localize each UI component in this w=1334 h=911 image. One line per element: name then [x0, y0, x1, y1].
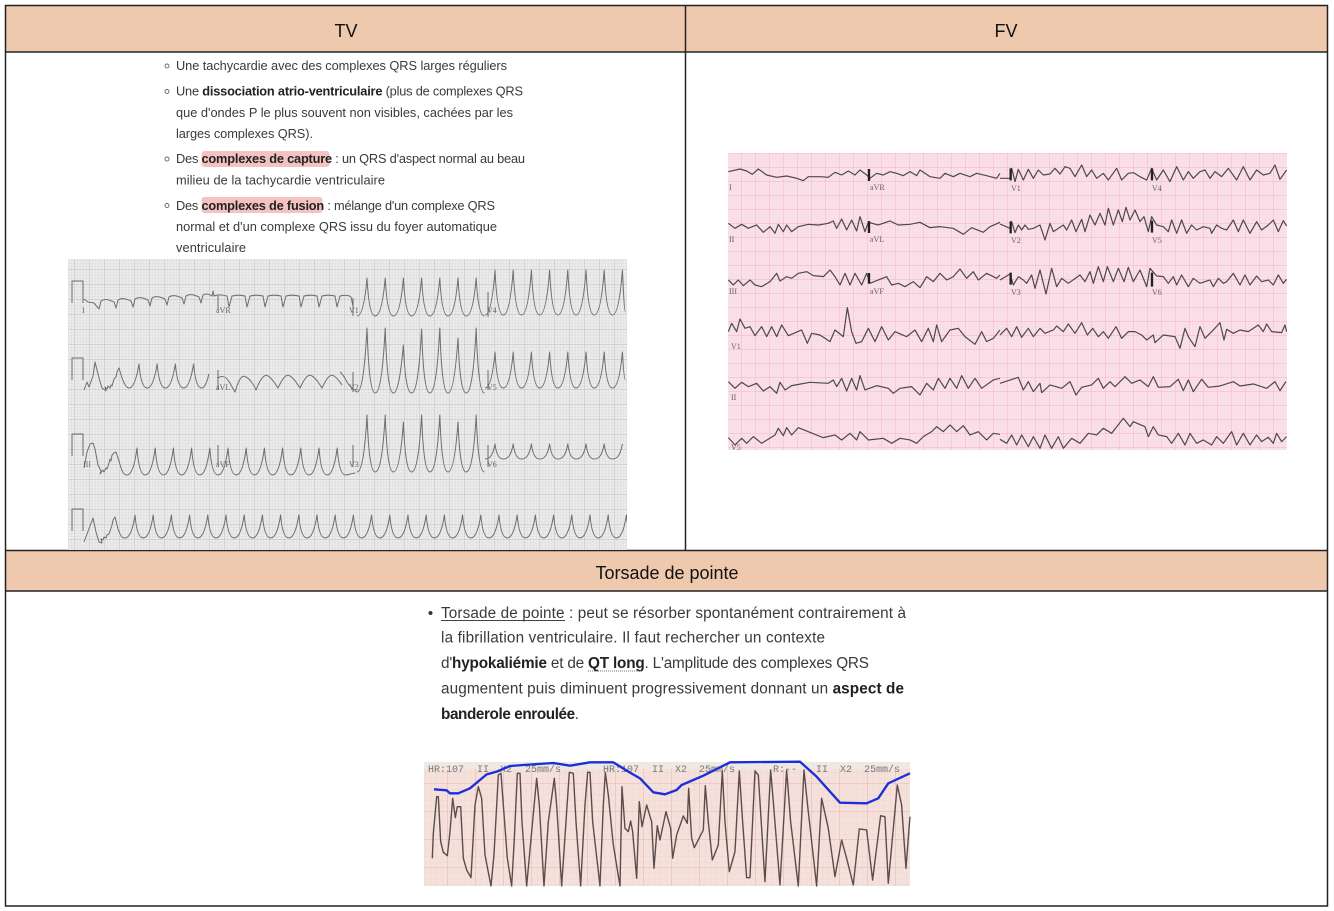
chart: Torsade de pointe ECG strip: HR:107 [428, 765, 464, 776]
text block: TV criteria: Des complexes de capture : un QRS d'aspect normal au beau [176, 151, 525, 166]
text block: TV criteria: Des complexes de fusion : mélange d'un complexe QRS [176, 198, 495, 213]
text block: Torsade de pointe description: la fibrillation ventriculaire. Il faut rechercher un contexte [441, 630, 825, 646]
heading: TV: TV [334, 21, 358, 41]
chart: Torsade de pointe ECG strip: X2 [675, 765, 687, 776]
chart: FV 12-lead ECG: aVF [870, 287, 884, 296]
chart: FV 12-lead ECG: aVL [870, 235, 884, 244]
chart: FV 12-lead ECG: II [731, 393, 737, 402]
text block: TV criteria: Une dissociation atrio-ventriculaire (plus de complexes QRS [176, 84, 523, 98]
chart: TV 12-lead ECG: V2 [349, 383, 359, 392]
chart: FV 12-lead ECG: II [729, 235, 735, 244]
chart: TV 12-lead ECG: I [82, 306, 85, 315]
text block: Torsade de pointe description: d'hypokaliémie et de QT long. L'amplitude des complexes QRS [441, 655, 869, 672]
chart: FV 12-lead ECG: V5 [731, 443, 741, 452]
chart: TV 12-lead ECG [68, 259, 635, 550]
text block: TV criteria: milieu de la tachycardie ventriculaire [176, 172, 385, 188]
heading: Torsade de pointe: Torsade de pointe [596, 563, 738, 583]
chart: FV 12-lead ECG: V3 [1011, 288, 1021, 297]
text block: TV criteria: Une tachycardie avec des complexes QRS larges réguliers [176, 58, 507, 73]
chart: Torsade de pointe ECG strip [424, 762, 910, 886]
chart: TV 12-lead ECG: V6 [487, 460, 497, 469]
chart: TV 12-lead ECG: V4 [487, 306, 497, 315]
chart: Torsade de pointe ECG strip: X2 [500, 765, 512, 776]
chart: FV 12-lead ECG: III [729, 287, 737, 296]
chart: Torsade de pointe ECG strip: 25mm/s [525, 764, 561, 776]
chart: Torsade de pointe ECG strip: 25mm/s [699, 764, 735, 776]
chart: FV 12-lead ECG: V5 [1152, 236, 1162, 245]
chart: Torsade de pointe ECG strip: II [652, 765, 664, 776]
chart: FV 12-lead ECG: V1 [731, 342, 741, 351]
text block: TV criteria: normal et d'un complexe QRS issu du foyer automatique [176, 219, 497, 234]
chart: TV 12-lead ECG: aVR [216, 306, 231, 315]
chart: TV 12-lead ECG: V3 [349, 460, 359, 469]
text block: TV criteria: ventriculaire [176, 240, 246, 255]
heading: FV: FV [994, 21, 1018, 41]
chart: FV 12-lead ECG: aVR [870, 183, 885, 192]
text block: TV criteria: larges complexes QRS). [176, 126, 313, 141]
chart: FV 12-lead ECG [728, 153, 1287, 452]
chart: Torsade de pointe ECG strip: II [816, 765, 828, 776]
text block: Torsade de pointe description: banderole enroulée. [441, 706, 579, 723]
chart: FV 12-lead ECG: I [729, 183, 732, 192]
text block: Torsade de pointe description [428, 605, 906, 723]
chart: FV 12-lead ECG: V6 [1152, 288, 1162, 297]
text block: Torsade de pointe description: Torsade de pointe : peut se résorber spontanément contrairement à [441, 605, 906, 622]
chart: TV 12-lead ECG: III [83, 460, 91, 469]
text block: TV criteria [165, 58, 525, 255]
chart: Torsade de pointe ECG strip: X2 [840, 765, 852, 776]
chart: FV 12-lead ECG: V4 [1152, 184, 1162, 193]
chart: FV 12-lead ECG: V1 [1011, 184, 1021, 193]
chart: Torsade de pointe ECG strip: HR:107 [603, 765, 639, 776]
chart: TV 12-lead ECG: V5 [487, 383, 497, 392]
chart: Torsade de pointe ECG strip: R:-- [773, 765, 797, 776]
text block: TV criteria: que d'ondes P le plus souvent non visibles, cachées par les [176, 105, 513, 120]
chart: TV 12-lead ECG: V1 [349, 306, 359, 315]
chart: Torsade de pointe ECG strip: 25mm/s [864, 764, 900, 776]
text block: Torsade de pointe description: augmentent puis diminuent progressivement donnant un aspect de [441, 680, 904, 698]
chart: TV 12-lead ECG: aVF [216, 460, 230, 469]
chart: Torsade de pointe ECG strip: II [477, 765, 489, 776]
chart: TV 12-lead ECG: aVL [216, 383, 230, 392]
chart: FV 12-lead ECG: V2 [1011, 236, 1021, 245]
